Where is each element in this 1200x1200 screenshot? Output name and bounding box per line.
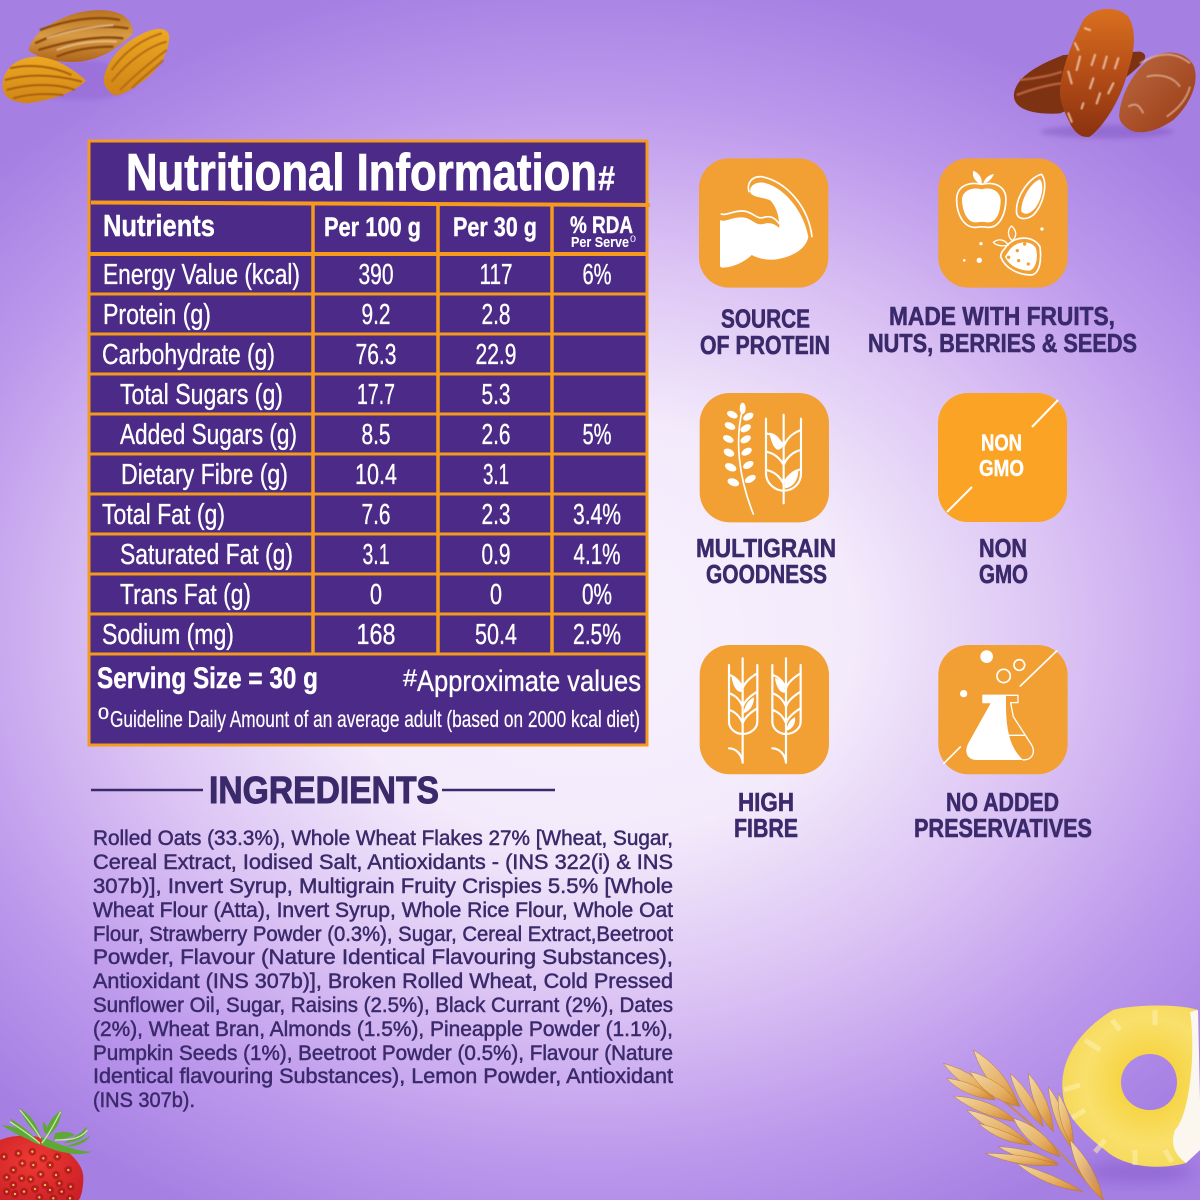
table footer notes: 0	[98, 704, 109, 723]
per 100 g values	[355, 259, 397, 651]
label: non gmo	[979, 533, 1028, 589]
% RDA values: 4.1%	[574, 539, 620, 571]
label: high fibre	[734, 787, 798, 843]
nutrient labels: Sodium (mg)	[102, 619, 234, 651]
ingredients text block	[93, 827, 673, 1112]
label: no added preservatives	[914, 787, 1092, 843]
% RDA values: 3.4%	[573, 499, 621, 531]
per 30 g values: 0	[490, 579, 502, 611]
% RDA values: 5%	[582, 419, 612, 451]
table footer notes: Serving Size = 30 g	[97, 662, 318, 695]
label: no added preservatives: PRESERVATIVES	[914, 813, 1092, 843]
label: non gmo: GMO	[979, 559, 1028, 589]
label: source of protein: SOURCE	[721, 304, 810, 334]
label: made with fruits, nuts, berries and seeds: MADE WITH FRUITS,	[889, 301, 1115, 331]
per 30 g values: 50.4	[475, 619, 517, 651]
icon: non gmo: GMO	[979, 455, 1024, 481]
nutrient labels: Added Sugars (g)	[120, 419, 297, 451]
panel: nutrition table	[89, 141, 650, 745]
ingredients text block: 307b)], Invert Syrup, Multigrain Fruity Crispies 5.5% [Whole	[93, 875, 673, 898]
per 100 g values: 17.7	[357, 379, 395, 411]
label: no added preservatives: NO ADDED	[946, 787, 1059, 817]
per 100 g values: 10.4	[355, 459, 397, 491]
per 30 g values	[475, 259, 517, 651]
table footer notes: #	[403, 665, 418, 692]
image: strawberry	[0, 1108, 92, 1200]
nutrient labels: Trans Fat (g)	[120, 579, 251, 611]
nutrient labels	[102, 259, 300, 651]
label: source of protein	[700, 304, 830, 360]
per 100 g values: 3.1	[362, 539, 390, 571]
table header row	[103, 208, 636, 251]
per 100 g values: 390	[358, 259, 394, 291]
ingredients text block: Cereal Extract, Iodised Salt, Antioxidants - (INS 322(i) & INS	[93, 851, 673, 874]
table footer notes	[97, 662, 641, 732]
per 30 g values: 5.3	[482, 379, 510, 411]
title: Nutritional Information	[126, 144, 597, 202]
per 100 g values: 9.2	[362, 299, 390, 331]
table header row: Nutrients	[103, 208, 215, 243]
per 100 g values: 168	[356, 619, 396, 651]
image: almonds	[3, 10, 169, 103]
image: oats	[943, 1050, 1103, 1200]
icon: multigrain	[700, 393, 829, 522]
label: source of protein: OF PROTEIN	[700, 330, 830, 360]
per 30 g values: 22.9	[476, 339, 516, 371]
per 30 g values: 3.1	[483, 459, 509, 491]
image: pineapple ring	[1062, 1006, 1200, 1184]
icon: non gmo: NON	[981, 430, 1022, 456]
icon: fruits, nuts, berries and seeds	[938, 158, 1068, 288]
table footer notes: Approximate values	[417, 665, 641, 698]
icon: no added preservatives	[938, 645, 1068, 774]
image: dates	[1014, 9, 1196, 138]
nutrient labels: Protein (g)	[103, 299, 211, 331]
per 30 g values: 2.3	[482, 499, 510, 531]
table header row: Per Serve	[571, 234, 629, 251]
label: high fibre: FIBRE	[734, 813, 798, 843]
ingredients text block: Flour, Strawberry Powder (0.3%), Sugar, Cereal Extract,Beetroot	[93, 923, 673, 946]
table header row: Per 30 g	[453, 212, 537, 242]
label: non gmo: NON	[979, 533, 1027, 563]
label: high fibre: HIGH	[738, 787, 794, 817]
table footer notes: Guideline Daily Amount of an average adult (based on 2000 kcal diet)	[110, 706, 640, 732]
per 30 g values: 0.9	[482, 539, 510, 571]
title: #	[598, 160, 615, 198]
% RDA values	[573, 259, 621, 651]
ingredients text block: Sunflower Oil, Sugar, Raisins (2.5%), Black Currant (2%), Dates	[93, 994, 673, 1017]
nutrient labels: Carbohydrate (g)	[102, 339, 275, 371]
per 30 g values: 2.8	[482, 299, 510, 331]
label: multigrain goodness	[696, 533, 836, 589]
nutrient labels: Energy Value (kcal)	[103, 259, 300, 291]
ingredients text block: (INS 307b).	[93, 1089, 195, 1112]
per 100 g values: 76.3	[356, 339, 396, 371]
table header row: % RDA	[570, 212, 633, 239]
label: multigrain goodness: GOODNESS	[706, 559, 827, 589]
per 30 g values: 117	[480, 259, 512, 291]
icon: non gmo	[938, 393, 1067, 522]
ingredients text block: Wheat Flour (Atta), Invert Syrup, Whole Rice Flour, Whole Oat	[93, 899, 673, 922]
% RDA values: 6%	[582, 259, 612, 291]
per 100 g values: 0	[370, 579, 382, 611]
ingredients text block: (2%), Wheat Bran, Almonds (1.5%), Pineapple Powder (1.1%),	[93, 1018, 673, 1041]
nutrient labels: Saturated Fat (g)	[120, 539, 293, 571]
nutrient labels: Total Sugars (g)	[120, 379, 283, 411]
ingredients text block: Powder, Flavour (Nature Identical Flavouring Substances),	[93, 946, 673, 969]
nutrient labels: Dietary Fibre (g)	[121, 459, 288, 491]
table header row: 0	[630, 234, 636, 244]
table header row: Per 100 g	[324, 212, 421, 242]
per 100 g values: 8.5	[362, 419, 390, 451]
nutrient labels: Total Fat (g)	[102, 499, 225, 531]
ingredients text block: Antioxidant (INS 307b)], Broken Rolled Wheat, Cold Pressed	[93, 970, 673, 993]
per 100 g values: 7.6	[362, 499, 390, 531]
label: made with fruits, nuts, berries and seeds: NUTS, BERRIES & SEEDS	[868, 328, 1137, 358]
ingredients text block: Pumpkin Seeds (1%), Beetroot Powder (0.5%), Flavour (Nature	[93, 1042, 673, 1065]
ingredients text block: Identical flavouring Substances), Lemon Powder, Antioxidant	[93, 1065, 673, 1088]
% RDA values: 0%	[582, 579, 612, 611]
ingredients text block: Rolled Oats (33.3%), Whole Wheat Flakes 27% [Wheat, Sugar,	[93, 827, 673, 850]
per 30 g values: 2.6	[482, 419, 510, 451]
label: made with fruits, nuts, berries and seeds	[868, 301, 1137, 358]
heading: ingredients: INGREDIENTS	[209, 770, 439, 812]
% RDA values: 2.5%	[573, 619, 621, 651]
icon: high fibre	[700, 645, 829, 774]
icon: source of protein	[699, 158, 828, 288]
label: multigrain goodness: MULTIGRAIN	[696, 533, 836, 563]
